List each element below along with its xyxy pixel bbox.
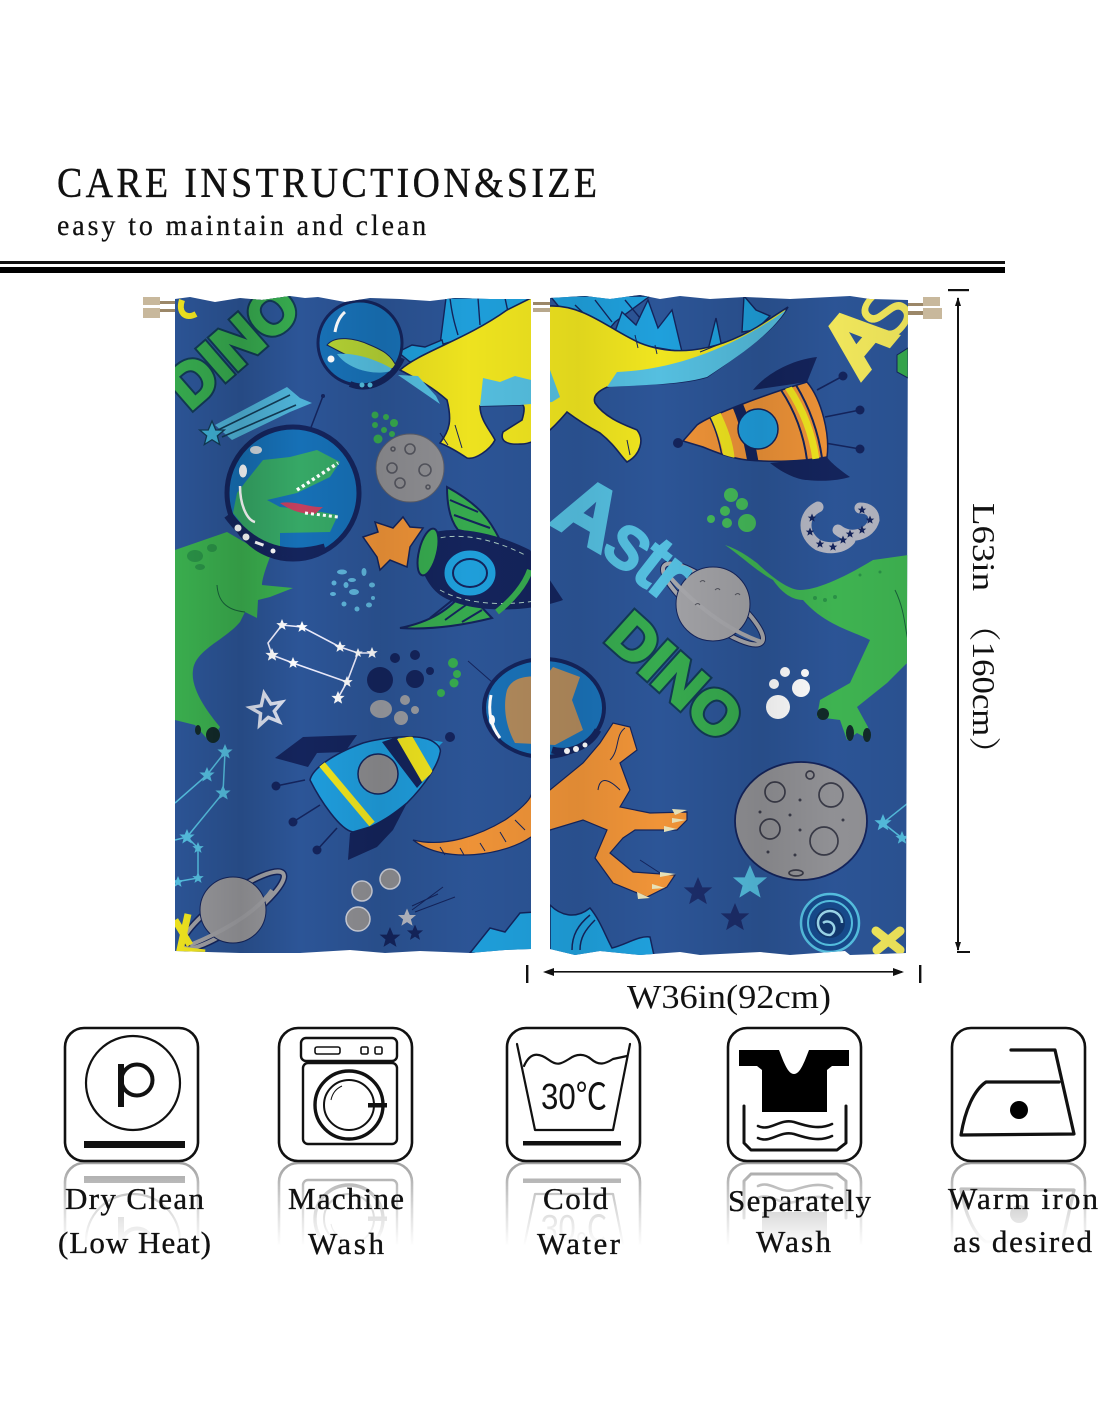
yellow AS lettering: A (804, 288, 912, 392)
dark, grey and green dots (367, 650, 461, 725)
curtain rod (143, 297, 942, 319)
icon reflections (65, 1163, 1085, 1296)
ringed planet right (660, 560, 766, 648)
label: warm iron: as desired (953, 1224, 1092, 1259)
comet (200, 387, 312, 445)
width dimension arrow (526, 965, 921, 983)
cyan Astr lettering (550, 482, 693, 598)
curtain panels with space dinosaur print (155, 272, 928, 960)
green DINO lettering left: DINO (155, 272, 312, 421)
green rocket (363, 487, 563, 629)
label: separately wash: Wash (756, 1224, 832, 1259)
yellow AS lettering: S (843, 273, 928, 354)
icon: separately wash (728, 1028, 861, 1161)
label: machine wash: Wash (308, 1226, 384, 1261)
yellow AS lettering (828, 298, 908, 383)
stars bottom right (684, 865, 767, 930)
label: cold water: Water (537, 1226, 621, 1261)
height label: （160cm） (966, 607, 1002, 771)
cyan Astr lettering: str (590, 498, 708, 617)
right green dinosaur (725, 545, 908, 742)
right green dots (707, 488, 756, 532)
cyan constellation right (874, 803, 909, 844)
icon: cold water 30C (507, 1028, 640, 1161)
header double rule (0, 261, 1005, 273)
green DINO lettering right: DINO (595, 600, 755, 753)
flame (363, 517, 423, 570)
grey stars cluster bottom (346, 869, 455, 947)
icon: machine wash (279, 1028, 412, 1161)
white constellation (265, 619, 378, 704)
yellow X left (175, 914, 205, 953)
yellow crescent top left (181, 300, 196, 316)
label: dry clean: (Low Heat) (58, 1225, 211, 1260)
outline star (248, 690, 285, 726)
width label: W36in(92cm) (627, 979, 831, 1016)
bottom stegosaurus plates (470, 905, 655, 960)
helmet with orange T-rex head (468, 659, 604, 757)
label: separately wash (728, 1183, 872, 1259)
label: cold water: Cold (543, 1181, 608, 1216)
green DINO lettering left: DINO (155, 272, 312, 421)
infographic: care instruction and size (0, 168, 1098, 1260)
green DINO lettering right: DINO (595, 600, 755, 753)
helmet with stegosaurus head (318, 301, 402, 388)
icon: warm iron (952, 1028, 1085, 1161)
grey asteroid (376, 434, 444, 502)
green DINO lettering left (175, 296, 298, 414)
fabric folds shading (170, 290, 915, 960)
grey starry crescents (806, 506, 874, 551)
big grey moon (735, 762, 867, 880)
cyan Astr lettering: A (540, 457, 640, 569)
yellow stegosaurus (398, 298, 788, 462)
label: warm iron (948, 1181, 1098, 1259)
label: dry clean (58, 1181, 211, 1260)
label: machine wash: Machine (288, 1181, 404, 1216)
cyan constellation left (172, 744, 233, 887)
yellow X right (876, 931, 900, 950)
label: cold water (537, 1181, 621, 1261)
label: separately wash: Separately (728, 1183, 872, 1218)
stegosaurus back plates (398, 296, 770, 362)
icon: dry clean (65, 1028, 198, 1161)
T-rex green body left (175, 532, 293, 742)
label: dry clean: Dry Clean (65, 1181, 204, 1216)
label: machine wash (288, 1181, 404, 1261)
T-rex spots and claws (187, 544, 245, 743)
subtitle: easy to maintain and clean (57, 209, 427, 242)
height dimension arrow (948, 289, 970, 953)
title: CARE INSTRUCTION&SIZE (57, 159, 597, 206)
blue dot ring (330, 568, 375, 612)
ringed planet left (184, 868, 288, 952)
white paw print (766, 667, 810, 719)
blue rocket (272, 732, 455, 860)
green shape right edge (897, 348, 908, 378)
height label (966, 503, 1002, 771)
spiral galaxy (801, 894, 859, 952)
label: warm iron: Warm iron (948, 1181, 1098, 1216)
height label: L63in (966, 503, 1002, 591)
orange T-rex (413, 723, 687, 899)
green dots (372, 412, 398, 444)
helmet with T-rex head (227, 394, 359, 559)
orange rocket (673, 357, 864, 481)
